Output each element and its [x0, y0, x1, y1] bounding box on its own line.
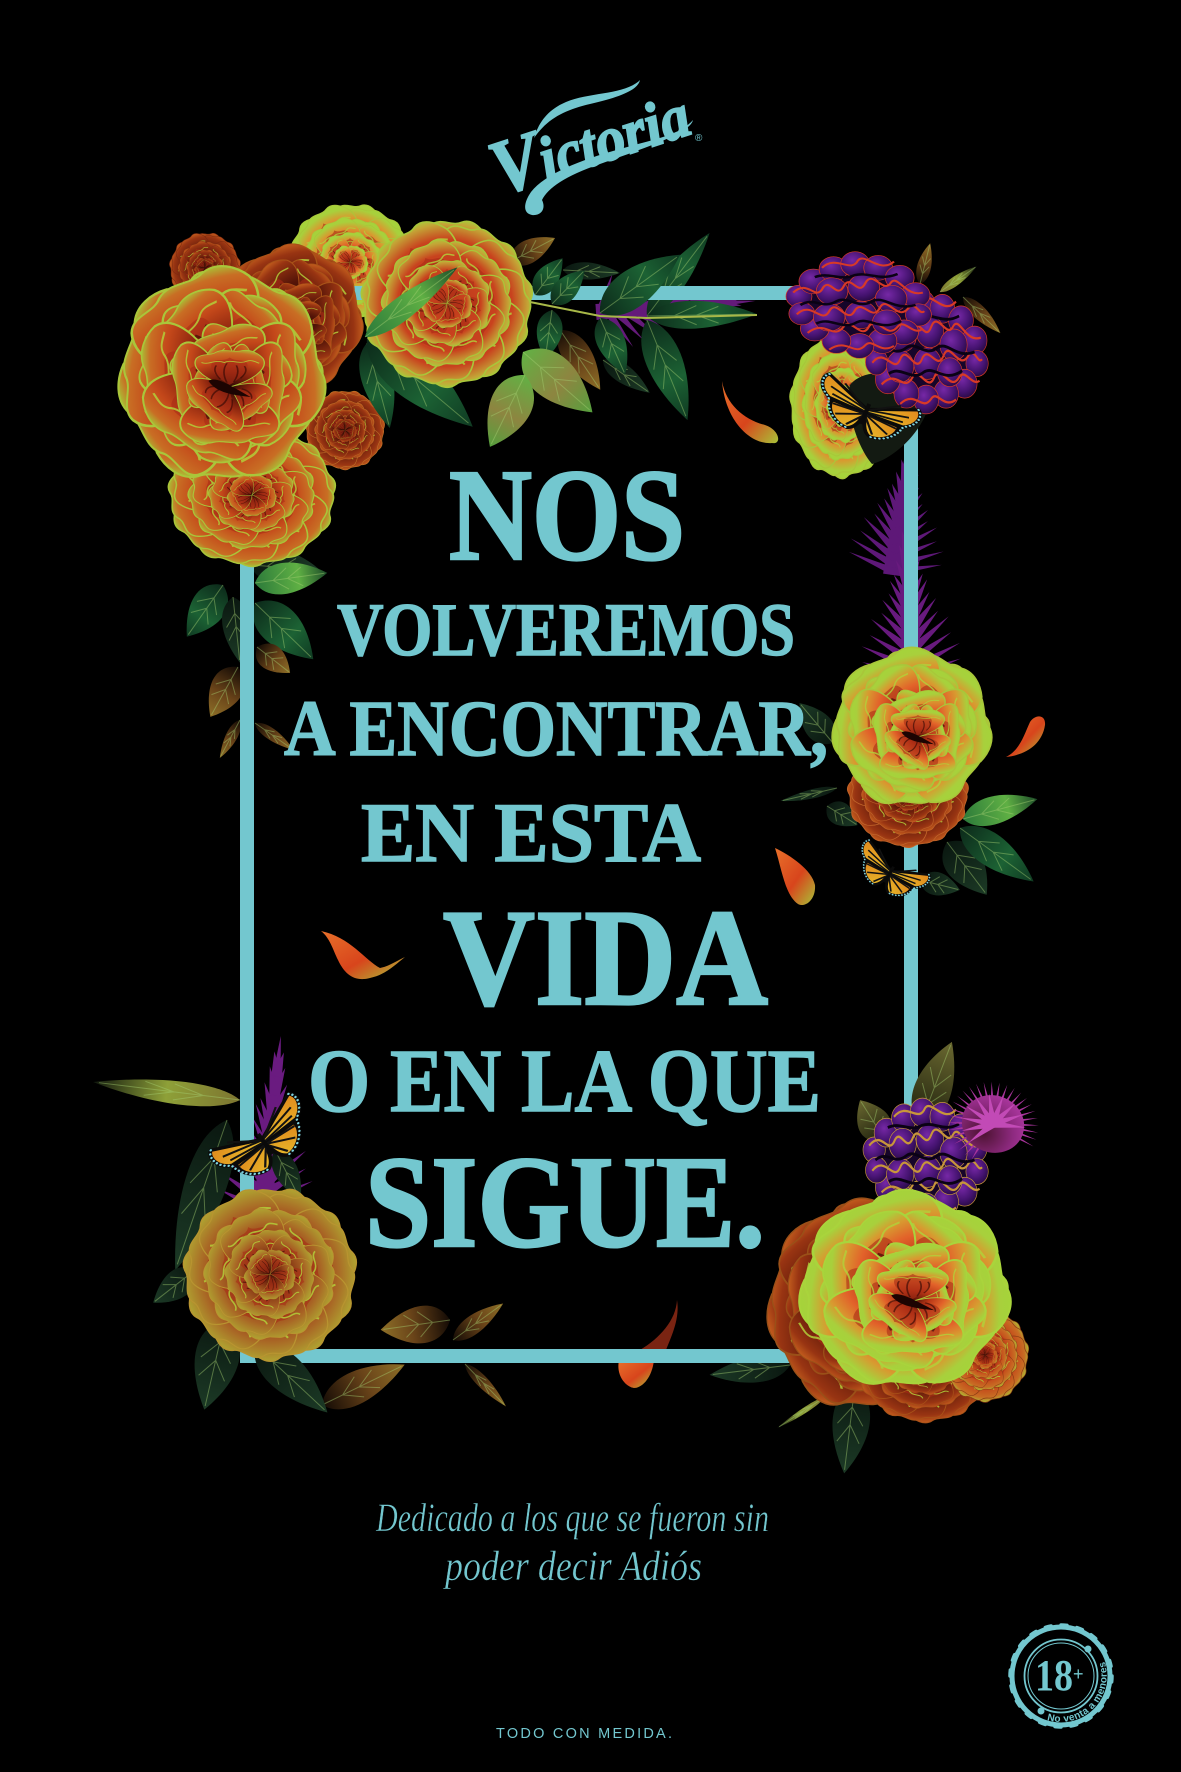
flower group: bottom left [175, 1180, 365, 1426]
back top marigold [281, 198, 419, 325]
VIDA: VIDA [443, 881, 768, 1034]
rear dark marigold [842, 738, 974, 851]
flower group: right middle [779, 638, 1044, 906]
butterfly: top right [810, 373, 922, 451]
dark leaves over marigold [849, 373, 930, 464]
EN ESTA: EN ESTA [361, 786, 701, 880]
foliage and flowers behind the frame [92, 198, 964, 1419]
main marigold [821, 638, 1003, 813]
top branch with leaves [472, 239, 757, 456]
frame [247, 293, 911, 1356]
tagline: TODO CON MEDIDA. [496, 1726, 672, 1742]
flower group: top left [103, 212, 541, 571]
thistle [935, 1069, 1051, 1179]
main lime peony [784, 1178, 1026, 1396]
rear dark peony [753, 1186, 971, 1418]
falling petal: upper right [722, 381, 778, 443]
dark right peony [210, 235, 374, 397]
flower group: top right celosia [785, 242, 1005, 484]
handwritten dedication: Dedicado a los que se fueron sin [375, 1495, 769, 1540]
bottom-left long leaves [92, 1071, 311, 1314]
large marigold [103, 253, 341, 491]
O EN LA QUE: O EN LA QUE [308, 1032, 821, 1131]
plume behind right bar, lower [854, 514, 964, 682]
VOLVEREMOS: VOLVEREMOS [337, 589, 795, 672]
plume behind right bar, upper [844, 429, 962, 582]
badge: 18+: 18 [1035, 1651, 1073, 1700]
NOS: NOS [449, 443, 685, 588]
flower group: bottom right [753, 1035, 1051, 1476]
small rear marigold [302, 387, 388, 473]
bottom leaves [776, 1383, 874, 1476]
logo: Victoria: ® [695, 133, 703, 144]
plume behind left bar [213, 1031, 330, 1220]
badge: 18+ [1008, 1623, 1114, 1729]
dark green leaves [183, 1315, 341, 1426]
right rose marigold [353, 212, 541, 393]
bottom-left brown leaves [315, 1296, 510, 1419]
falling petal: centre right [775, 848, 815, 905]
A ENCONTRAR,: A ENCONTRAR, [284, 686, 828, 773]
handwritten dedication [375, 1495, 769, 1590]
falling petal: left of VIDA [321, 931, 405, 979]
ochre marigold [175, 1180, 365, 1367]
dark top petals [166, 229, 244, 306]
logo: Victoria: Victoria [478, 66, 699, 212]
badge: 18+: No venta a menores [1048, 1662, 1107, 1722]
lower right petals [937, 1304, 1033, 1406]
badge: 18+: + [1073, 1664, 1084, 1684]
headline [284, 443, 828, 1275]
lower marigold [161, 418, 343, 571]
bottom-right dark leaf [708, 1353, 792, 1388]
SIGUE.: SIGUE. [365, 1130, 765, 1275]
plume behind top bar [593, 261, 758, 352]
leaves [779, 694, 1044, 906]
lime leaf [358, 258, 464, 346]
celosia [863, 1098, 988, 1222]
handwritten dedication: poder decir Adiós [442, 1544, 702, 1590]
butterfly: right middle [849, 839, 931, 907]
butterfly: bottom left [207, 1092, 321, 1192]
yellow marigold [785, 325, 899, 484]
olive leaves [913, 242, 1005, 338]
lower dark petals [851, 1302, 999, 1427]
falling petal: bottom centre [618, 1300, 678, 1388]
celosia right lobe [863, 290, 988, 414]
falling petal: far right [1006, 716, 1045, 757]
left bar leaves [173, 548, 329, 761]
olive leaves [846, 1035, 969, 1149]
top branch leaves behind the bar [504, 225, 757, 329]
dark leaf left [352, 339, 405, 432]
celosia left lobe [786, 252, 931, 358]
dark big leaf [353, 320, 488, 444]
